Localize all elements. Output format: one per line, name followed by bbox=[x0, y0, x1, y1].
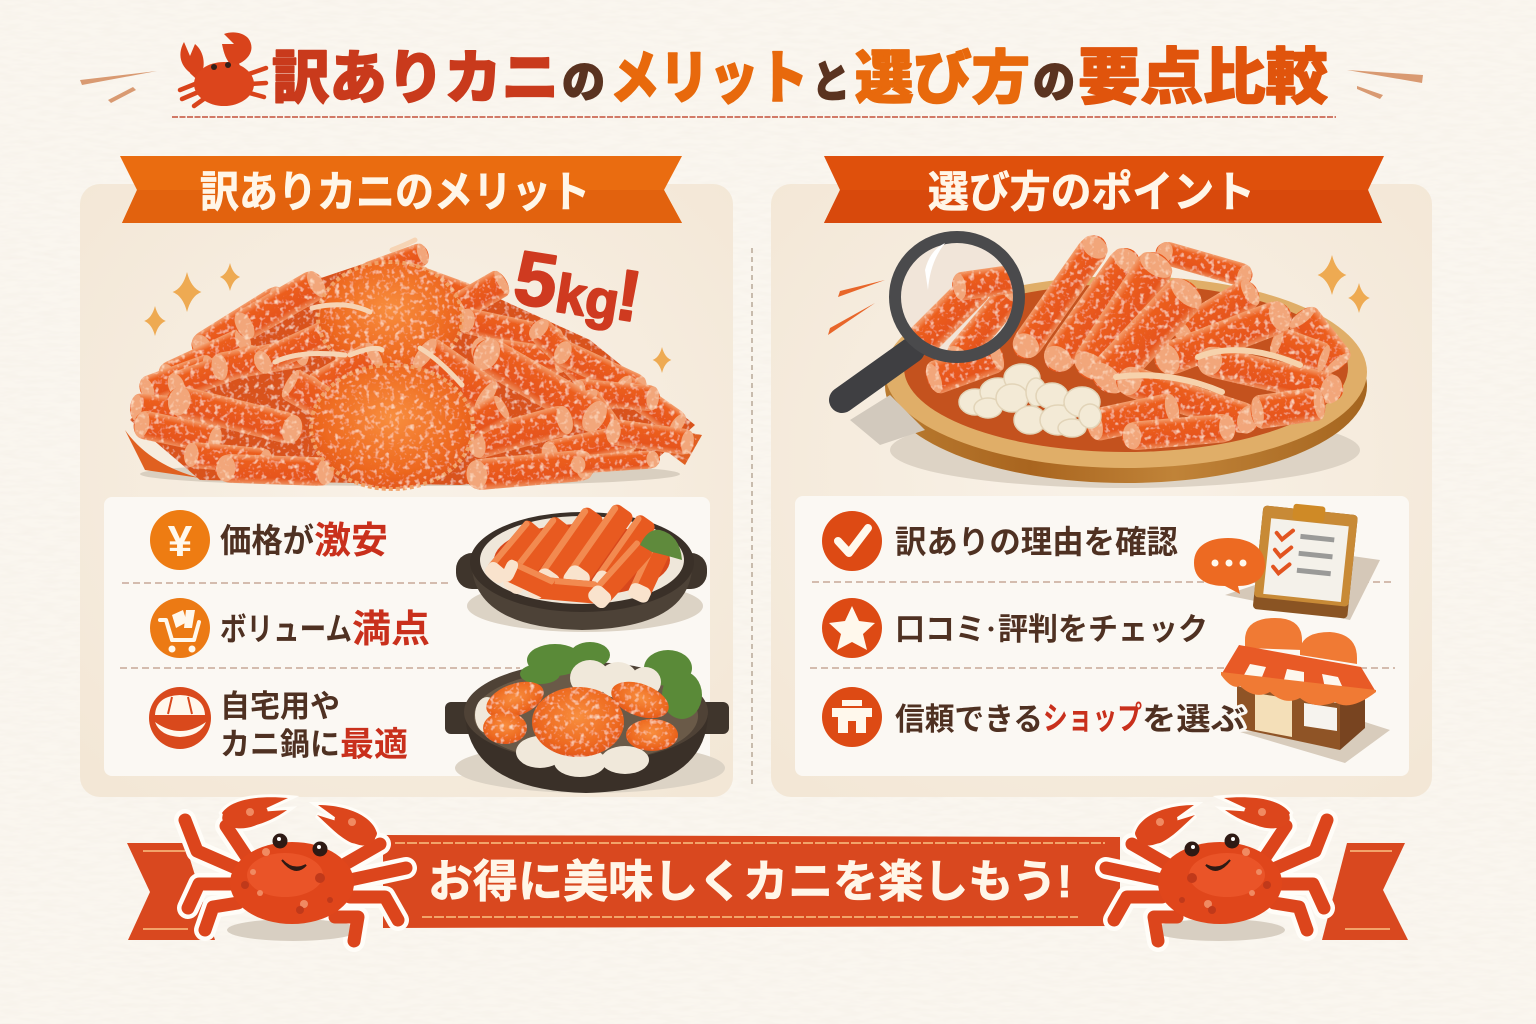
sparkles bbox=[144, 263, 671, 373]
list box: merits bbox=[104, 497, 710, 776]
title accent strokes bbox=[80, 70, 1423, 103]
title: 選び方 bbox=[855, 46, 1030, 111]
item: trusted shop bbox=[822, 687, 1142, 747]
icon: chat bubble bbox=[1194, 538, 1265, 594]
icon: small crab bbox=[180, 32, 266, 106]
item: low price: 価格が bbox=[220, 522, 314, 559]
sparkles bbox=[1318, 255, 1370, 313]
panel divider bbox=[751, 248, 753, 785]
icon: clipboard bbox=[1225, 500, 1380, 620]
crab meat bbox=[959, 364, 1101, 437]
icon: magnifying glass bbox=[842, 237, 1034, 445]
text: choose shop end: を選ぶ bbox=[1142, 702, 1245, 737]
item: check reason bbox=[822, 511, 1178, 571]
item: trusted shop: ショップ bbox=[1043, 700, 1142, 736]
wooden plate of crab legs bbox=[885, 229, 1367, 488]
dish: crab hot pot bbox=[445, 642, 729, 793]
crab pile illustration bbox=[125, 240, 702, 491]
callout: 5kg: ! bbox=[611, 255, 647, 338]
item: hot pot bbox=[149, 687, 408, 764]
callout: 5kg: kg bbox=[552, 263, 623, 333]
dish: crab sticks bbox=[456, 502, 707, 632]
callout: 5kg bbox=[509, 235, 647, 339]
item: check reviews bbox=[822, 598, 1208, 658]
ribbon heading: merits: 訳ありカニのメリット bbox=[200, 169, 590, 217]
title: の bbox=[1033, 58, 1075, 107]
item: volume: ボリューム bbox=[220, 611, 352, 647]
item: hot pot: 最適 bbox=[340, 726, 408, 764]
title: 要点比較 bbox=[1078, 43, 1328, 111]
title: メリット bbox=[610, 46, 808, 111]
infographic bbox=[80, 32, 1432, 952]
bottom ribbon banner bbox=[127, 835, 1408, 940]
item: low price: ¥ bbox=[168, 517, 193, 566]
crab mascot right bbox=[1106, 797, 1327, 941]
title: と bbox=[812, 58, 850, 107]
banner text: お得に美味しくカニを楽しもう! bbox=[428, 856, 1072, 907]
item: volume bbox=[150, 598, 430, 658]
ribbon heading: how to choose: 選び方のポイント bbox=[928, 169, 1255, 217]
title bbox=[272, 43, 1328, 111]
ribbon heading: how to choose bbox=[824, 156, 1384, 223]
item: low price: 激安 bbox=[314, 520, 388, 561]
crab mascot left bbox=[185, 797, 406, 941]
callout: 5kg: 5 bbox=[509, 235, 564, 326]
item: check reviews: 評判をチェック bbox=[998, 612, 1208, 647]
ribbon heading: merits bbox=[120, 156, 682, 223]
item: check reviews: 口コミ bbox=[895, 612, 985, 647]
panel: merits bbox=[80, 156, 733, 797]
item: check reason: 訳ありの理由を確認 bbox=[895, 524, 1178, 560]
item: low price bbox=[150, 510, 388, 570]
item: volume: 満点 bbox=[352, 609, 430, 651]
motion strokes bbox=[828, 280, 885, 335]
title: 訳ありカニ bbox=[272, 46, 559, 111]
item: hot pot: カニ鍋に bbox=[220, 727, 340, 762]
title: の bbox=[562, 58, 605, 107]
panel: how to choose bbox=[771, 156, 1432, 797]
item: trusted shop: 信頼できる bbox=[895, 702, 1043, 737]
list box: choosing bbox=[795, 496, 1409, 776]
item: hot pot: 自宅用や bbox=[220, 689, 340, 724]
icon: shop bbox=[1221, 618, 1390, 763]
